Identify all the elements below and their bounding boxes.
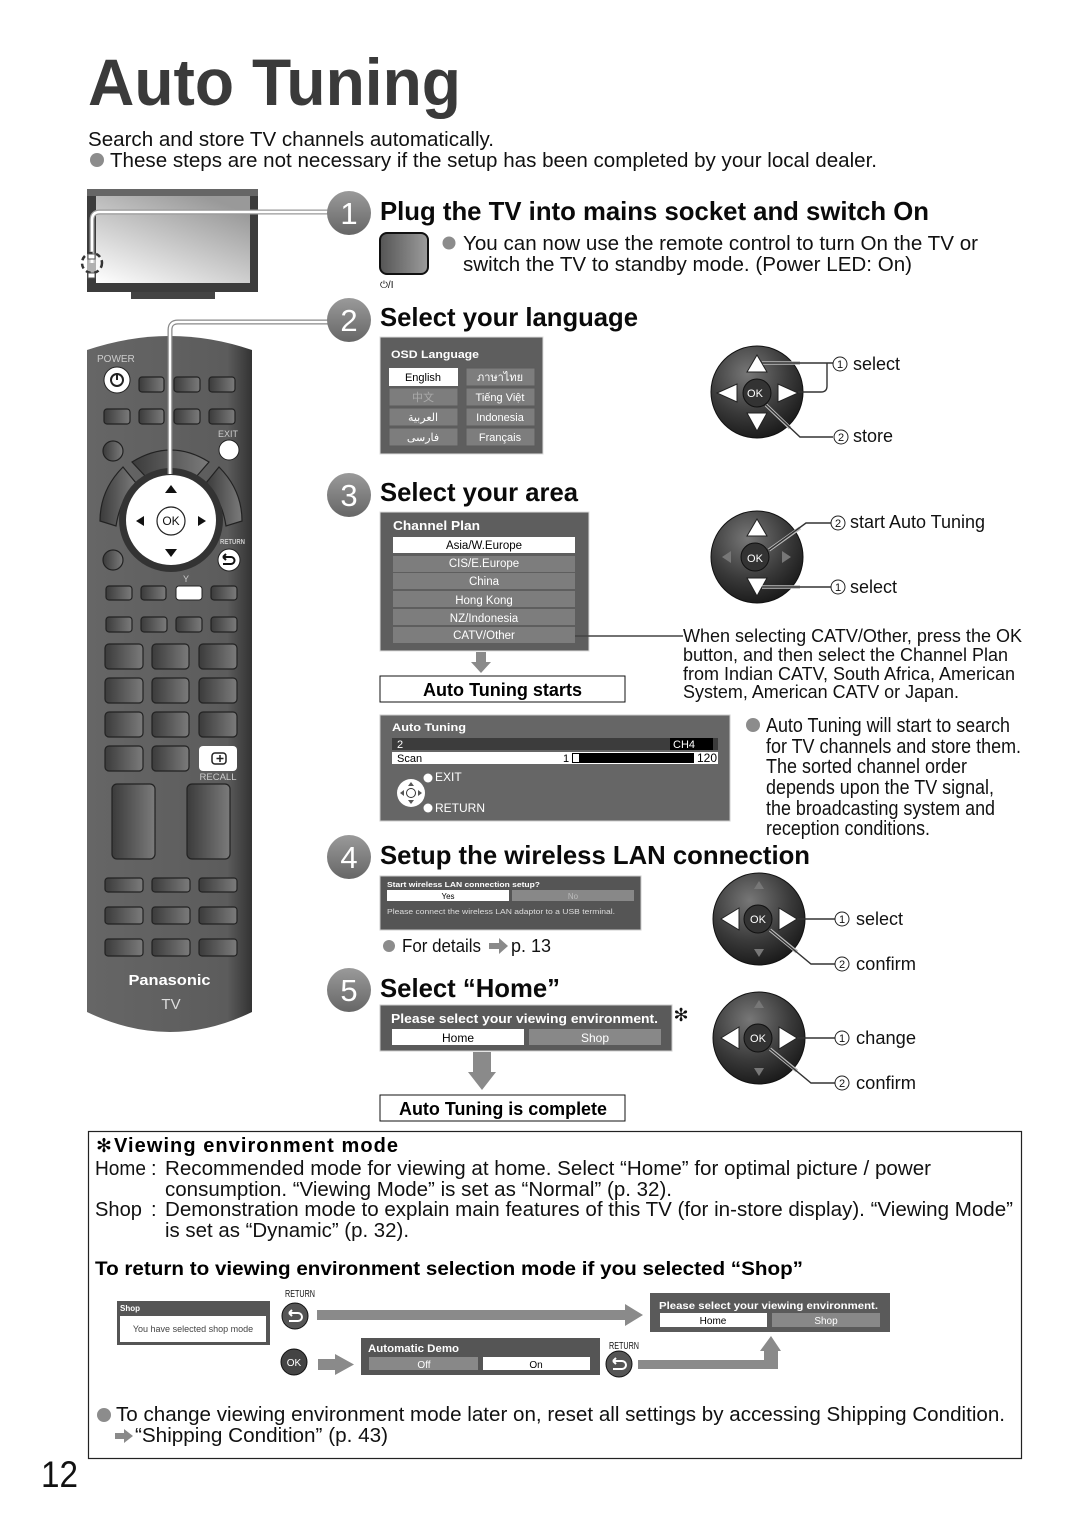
return button: RETURN <box>609 1341 639 1352</box>
environment screen small: Home <box>700 1316 727 1327</box>
long arrow <box>317 1304 643 1326</box>
auto tuning screen: Auto Tuning <box>392 722 466 734</box>
power switch icon: ⏻/I <box>380 280 393 291</box>
auto tuning note: the broadcasting system and <box>766 798 995 820</box>
OSD language menu: ภาษาไทย <box>477 371 523 384</box>
label: confirm: confirm <box>856 954 916 974</box>
wireless LAN screen: No <box>568 892 579 901</box>
CATV note <box>683 626 1022 702</box>
title: Auto Tuning <box>88 45 461 119</box>
step 1 note: You can now use the remote control to turn On the TV or <box>463 233 978 255</box>
auto tuning note: depends upon the TV signal, <box>766 777 994 799</box>
automatic demo screen: Automatic Demo <box>368 1343 459 1355</box>
remote upper buttons <box>103 377 239 570</box>
auto tuning screen: 1 <box>563 753 569 765</box>
definitions: is set as “Dynamic” (p. 32). <box>165 1220 409 1242</box>
automatic demo screen <box>361 1338 600 1375</box>
channel plan menu: CIS/E.Europe <box>449 558 519 570</box>
box: Auto Tuning is complete: Auto Tuning is complete <box>399 1099 607 1119</box>
OSD language menu: Français <box>479 432 522 444</box>
recall button <box>199 746 237 783</box>
label: select <box>835 909 903 929</box>
power button <box>97 354 135 393</box>
numeric keys <box>105 644 237 771</box>
OSD language menu: OSD Language <box>391 349 479 361</box>
channel plan menu: China <box>469 576 500 588</box>
auto tuning screen: Scan <box>397 753 422 765</box>
remote pad: area: OK <box>747 553 764 565</box>
brand: Panasonic <box>128 972 210 989</box>
label: confirm: 2 <box>839 1078 845 1090</box>
label: select: 1 <box>835 582 841 594</box>
brand <box>128 972 210 1013</box>
subheading: To return to viewing environment selection mode if you selected “Shop” <box>95 1259 803 1280</box>
step 2: Select your language <box>380 302 638 332</box>
definitions: Home <box>95 1158 146 1180</box>
intro text: These steps are not necessary if the setup has been completed by your local dealer. <box>110 150 877 172</box>
automatic demo screen: On <box>529 1360 543 1371</box>
recall button: RECALL <box>200 772 236 783</box>
box: Auto Tuning is complete <box>380 1095 625 1121</box>
step 3: Select your area <box>380 477 579 507</box>
step 5: Select “Home” <box>380 973 560 1003</box>
auto tuning note <box>746 715 1021 840</box>
page number: 12 <box>41 1454 78 1495</box>
remote control: RETURN <box>220 537 245 546</box>
label: store: store <box>853 426 893 446</box>
shipping note: “Shipping Condition” (p. 43) <box>135 1425 388 1447</box>
wireless LAN screen <box>380 876 641 930</box>
OSD language menu: Tiếng Việt <box>476 392 524 404</box>
panel heading: Viewing environment mode <box>114 1135 398 1157</box>
wireless LAN screen: Please connect the wireless LAN adaptor to a USB terminal. <box>387 909 615 916</box>
step 1: 1 <box>340 196 358 231</box>
return button <box>606 1341 639 1377</box>
short arrow <box>318 1354 354 1375</box>
remote control: Y <box>183 574 189 584</box>
label: start Auto Tuning: 2 <box>835 518 841 530</box>
auto tuning note: reception conditions. <box>766 818 930 840</box>
navigation ring: OK <box>162 514 180 528</box>
for details reference: p. 13 <box>511 936 551 956</box>
auto tuning screen: RETURN <box>435 801 485 815</box>
channel plan menu: NZ/Indonesia <box>450 613 519 625</box>
wireless LAN screen: Yes <box>441 892 455 901</box>
channel plan menu: Hong Kong <box>455 595 513 607</box>
remote control: EXIT <box>218 429 239 439</box>
label: store <box>834 426 893 446</box>
arrow down <box>471 652 491 673</box>
remote pad: home: OK <box>750 1033 767 1045</box>
auto tuning screen: CH4 <box>673 739 695 751</box>
for details reference: For details <box>402 936 481 956</box>
wireless LAN screen: Start wireless LAN connection setup? <box>387 882 540 889</box>
return button <box>218 549 240 571</box>
intro text: Search and store TV channels automatically. <box>88 129 494 151</box>
brand: TV <box>161 996 181 1013</box>
definitions: consumption. “Viewing Mode” is set as “Normal” (p. 32). <box>165 1179 672 1201</box>
OK button <box>281 1349 307 1375</box>
environment screen small: Shop <box>814 1316 838 1327</box>
step 5 <box>327 968 560 1012</box>
auto tuning note: for TV channels and store them. <box>766 736 1021 758</box>
step 1 note <box>442 233 978 276</box>
environment screen small: Please select your viewing environment. <box>659 1301 878 1312</box>
step 4: Setup the wireless LAN connection <box>380 840 810 870</box>
connector: step 2 to remote <box>170 322 330 474</box>
OSD language menu: العربية <box>408 412 438 424</box>
remote pad: LAN: OK <box>750 914 767 926</box>
definitions: Recommended mode for viewing at home. Select “Home” for optimal picture / power <box>165 1158 931 1180</box>
channel plan menu: Channel Plan <box>393 518 480 533</box>
auto tuning note: The sorted channel order <box>766 756 967 778</box>
label: start Auto Tuning: start Auto Tuning <box>850 512 985 532</box>
remote pad: home <box>713 992 835 1084</box>
shop screen: You have selected shop mode <box>133 1324 253 1334</box>
CATV note: from Indian CATV, South Africa, American <box>683 664 1015 684</box>
label: confirm: confirm <box>856 1073 916 1093</box>
power switch icon <box>380 233 428 291</box>
step 1: Plug the TV into mains socket and switch On <box>380 196 929 226</box>
CATV note: System, American CATV or Japan. <box>683 682 959 702</box>
callout line <box>575 635 683 637</box>
channel plan menu: CATV/Other <box>453 630 515 642</box>
CATV note: When selecting CATV/Other, press the OK <box>683 626 1022 646</box>
viewing environment screen: Shop <box>581 1031 609 1045</box>
label: select: select <box>853 354 900 374</box>
box: Auto Tuning starts: Auto Tuning starts <box>423 680 582 700</box>
definitions: Demonstration mode to explain main features of this TV (for in-store display). “Viewing Mode” <box>165 1199 1013 1221</box>
definitions: : <box>151 1158 157 1180</box>
step 3 <box>327 473 579 517</box>
box: Auto Tuning starts <box>380 676 625 702</box>
TV illustration <box>82 189 330 299</box>
OSD language menu: 中文 <box>412 390 434 404</box>
shipping note <box>97 1404 1005 1447</box>
OSD language menu: فارسی <box>407 432 439 444</box>
step 2: 2 <box>340 303 358 338</box>
viewing environment screen: Please select your viewing environment. <box>391 1011 658 1026</box>
channel plan menu <box>380 512 589 651</box>
arrow down <box>468 1052 496 1090</box>
remote pad: language: OK <box>747 388 764 400</box>
definitions: : <box>151 1199 157 1221</box>
step 3: 3 <box>340 478 358 513</box>
label: select: select <box>856 909 903 929</box>
step 4 <box>327 835 810 879</box>
step 4: 4 <box>340 840 358 875</box>
remote control <box>87 336 252 1032</box>
step 1 note: switch the TV to standby mode. (Power LED: On) <box>463 254 912 276</box>
label: select: 1 <box>837 359 843 371</box>
OSD language menu: Indonesia <box>476 412 525 424</box>
label: change: 1 <box>839 1033 845 1045</box>
channel plan menu: Asia/W.Europe <box>446 540 522 552</box>
shop screen: Shop <box>120 1304 140 1313</box>
step 2 <box>327 298 638 342</box>
label: select: select <box>850 577 897 597</box>
elbow arrow <box>638 1336 781 1369</box>
shop screen <box>117 1301 270 1345</box>
remote pad: language <box>711 346 833 438</box>
panel: viewing environment mode <box>88 1132 1022 1458</box>
asterisk: ✻ <box>673 1005 689 1025</box>
step 5: 5 <box>340 973 358 1008</box>
lower keys <box>105 878 237 956</box>
viewing environment screen <box>380 1005 672 1051</box>
return button: RETURN <box>285 1289 315 1300</box>
label: store: 2 <box>838 432 844 444</box>
auto tuning screen: EXIT <box>435 770 462 784</box>
label: confirm: 2 <box>839 959 845 971</box>
auto tuning screen: 120 <box>697 751 717 765</box>
navigation ring <box>100 450 242 572</box>
remote pad: area <box>711 511 833 603</box>
definitions <box>95 1158 1013 1242</box>
remote pad: LAN <box>713 873 835 965</box>
return button <box>282 1289 315 1329</box>
shipping note: To change viewing environment mode later on, reset all settings by accessing Shipping Condition. <box>116 1404 1005 1426</box>
colour keys row <box>106 586 237 632</box>
panel heading: ✻ <box>96 1136 112 1157</box>
volume and channel rockers <box>112 784 230 859</box>
OK button: OK <box>287 1358 302 1369</box>
viewing environment screen: Home <box>442 1031 474 1045</box>
power button: POWER <box>97 354 135 365</box>
auto tuning note: Auto Tuning will start to search <box>766 715 1010 737</box>
automatic demo screen: Off <box>417 1360 431 1371</box>
auto tuning screen: 2 <box>397 739 403 751</box>
definitions: Shop <box>95 1199 142 1221</box>
label: change: change <box>856 1028 916 1048</box>
OSD language menu <box>380 337 543 454</box>
label: select: 1 <box>839 914 845 926</box>
step 1 <box>327 191 929 235</box>
auto tuning screen <box>380 715 730 821</box>
OSD language menu: English <box>405 372 441 384</box>
environment screen small <box>650 1293 890 1332</box>
CATV note: button, and then select the Channel Plan <box>683 645 1008 665</box>
for details reference <box>383 936 551 956</box>
intro text <box>88 129 877 172</box>
